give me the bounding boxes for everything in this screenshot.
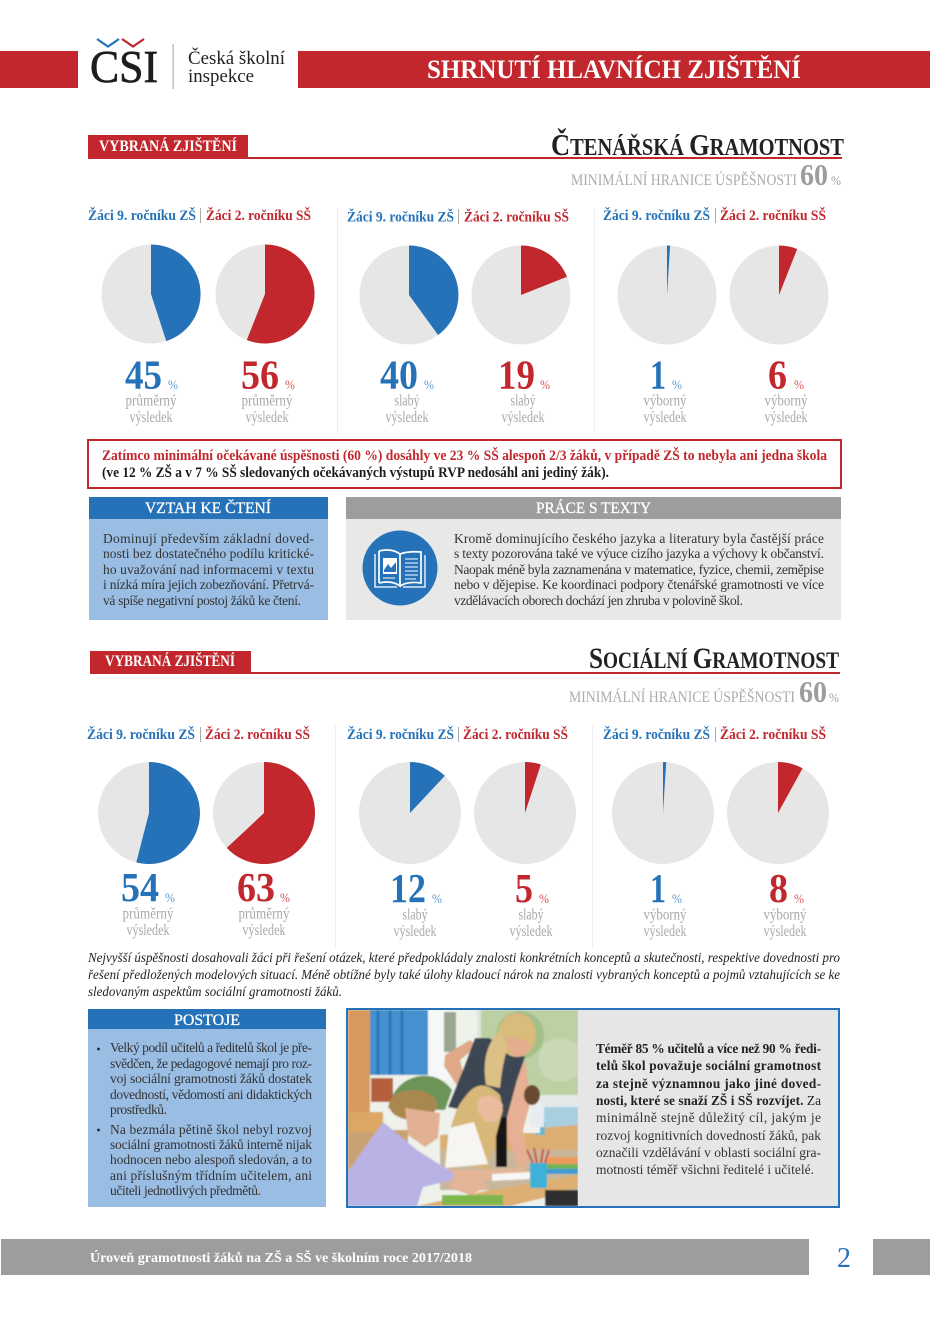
value: 45 % average: výsledek bbox=[130, 409, 172, 426]
value: 40 % weak bbox=[380, 352, 434, 426]
section heading: sociální gramotnost: SOCIÁLNÍ GRAMOTNOST bbox=[589, 642, 839, 675]
value: 56 % average: % bbox=[285, 377, 295, 392]
panel text: minimálně stejně důležitý cíl, jakým je bbox=[596, 1110, 821, 1125]
value: 63 % average: průměrný bbox=[238, 906, 290, 922]
second bullet: Na bezmála pětině škol nebyl rozvoj bbox=[110, 1122, 312, 1137]
value: 1 % excellent: % bbox=[672, 377, 682, 392]
threshold: minimal success 60 %: MINIMÁLNÍ HRANICE ÚSPĚŠNOSTI bbox=[571, 172, 797, 189]
chart group: average result, reading bbox=[88, 207, 315, 426]
second bullet: sociální gramotnosti žáků interně nijak bbox=[110, 1137, 312, 1152]
pie chart: 40 % bbox=[360, 246, 458, 344]
value: 45 % average: průměrný bbox=[126, 392, 176, 410]
pie chart: 1 % bbox=[618, 246, 716, 344]
column headings: Žáci 9. ročníku ZŠ bbox=[603, 726, 710, 743]
pie chart: 6 % bbox=[730, 246, 828, 344]
value: 12 % weak: 12 bbox=[390, 865, 426, 911]
value: 45 % average: 45 bbox=[125, 352, 162, 398]
panel text bbox=[103, 531, 314, 608]
panel text: rozvoj kognitivních dovedností žáků, pak bbox=[596, 1128, 821, 1143]
value: 40 % weak: výsledek bbox=[386, 409, 428, 426]
threshold: minimal success 60 %: % bbox=[831, 173, 841, 188]
header band bbox=[0, 51, 930, 88]
column headings: Žáci 9. ročníku ZŠ bbox=[88, 207, 196, 224]
value: 6 % excellent bbox=[764, 352, 808, 426]
panel heading: VZTAH KE ČTENÍ bbox=[145, 498, 271, 517]
column headings: Žáci 2. ročníku SŠ bbox=[463, 726, 568, 743]
value: 56 % average: průměrný bbox=[242, 392, 292, 410]
value: 12 % weak: výsledek bbox=[394, 923, 436, 940]
value: 8 % excellent: 8 bbox=[769, 865, 788, 911]
value: 8 % excellent: % bbox=[794, 891, 804, 906]
panel heading: POSTOJE bbox=[174, 1012, 240, 1029]
value: 63 % average: výsledek bbox=[242, 922, 286, 939]
value: 54 % average: % bbox=[165, 890, 175, 905]
panel text: s texty pozorována také ve výuce cizího jazyka a výchovy k občanství. bbox=[454, 546, 824, 561]
section heading: sociální gramotnost bbox=[90, 642, 840, 675]
value: 5 % weak bbox=[510, 865, 552, 940]
callout: minimum expected success bbox=[88, 440, 841, 488]
panel text bbox=[454, 531, 824, 608]
value: 54 % average: 54 bbox=[121, 864, 159, 910]
pie chart: 5 % bbox=[474, 762, 576, 864]
callout: minimum expected success: (ve 12 % ZŠ a v 7 % SŠ sledovaných očekávaných výstupů RVP nedosáhl ani jediný žák). bbox=[102, 464, 609, 481]
column headings: Žáci 2. ročníku SŠ bbox=[464, 208, 569, 226]
chart group: excellent result, reading bbox=[603, 207, 828, 426]
value: 8 % excellent: výsledek bbox=[764, 923, 806, 940]
panel text: za stejně významnou jako jiné doved- bbox=[596, 1076, 821, 1091]
first bullet: voj sociální gramotnosti žáků dostatek bbox=[110, 1071, 312, 1086]
value: 1 % excellent: výborný bbox=[644, 906, 686, 924]
panel text bbox=[596, 1041, 822, 1177]
value: 1 % excellent bbox=[644, 352, 686, 426]
column headings bbox=[603, 207, 826, 224]
value: 8 % excellent bbox=[764, 865, 806, 940]
value: 5 % weak: slabý bbox=[518, 906, 544, 924]
value: 6 % excellent: % bbox=[794, 377, 804, 392]
first bullet: prostředků. bbox=[110, 1102, 167, 1117]
section heading: čtenářská gramotnost: VYBRANÁ ZJIŠTĚNÍ bbox=[99, 136, 237, 155]
column headings bbox=[603, 726, 826, 743]
value: 19 % weak: % bbox=[540, 377, 550, 392]
section heading: sociální gramotnost: VYBRANÁ ZJIŠTĚNÍ bbox=[105, 651, 235, 670]
photo: teacher with pupils at desk bbox=[347, 1010, 582, 1206]
column headings: Žáci 2. ročníku SŠ bbox=[720, 207, 826, 224]
value: 6 % excellent: 6 bbox=[768, 352, 787, 398]
threshold: minimal success 60 % bbox=[571, 157, 841, 192]
pie chart: 12 % bbox=[359, 762, 461, 864]
text block: italic findings: řešení předložených modelových situací. Méně obtížné byly také úlohy kladoucí nárok na znalosti vybraných konceptů a pojmů vztahujících se ke bbox=[88, 968, 840, 983]
value: 6 % excellent: výborný bbox=[764, 392, 808, 410]
panel: teachers and principals bbox=[347, 1009, 839, 1207]
value: 1 % excellent: % bbox=[672, 891, 682, 906]
teacher bbox=[444, 1040, 477, 1087]
panel text: Dominují především základní doved- bbox=[103, 531, 314, 546]
chart group: weak result, reading bbox=[347, 208, 570, 426]
value: 56 % average: výsledek bbox=[246, 409, 288, 426]
value: 40 % weak: % bbox=[424, 377, 434, 392]
value: 45 % average: % bbox=[168, 377, 178, 392]
panel text: Téměř 85 % učitelů a více než 90 % ředi- bbox=[596, 1041, 821, 1056]
callout: minimum expected success: Zatímco minimální očekávané úspěšnosti (60 %) dosáhly ve 23 % SŠ alespoň 2/3 žáků, v případě ZŠ to nebyla ani jedna škola bbox=[102, 447, 828, 464]
value: 12 % weak: % bbox=[432, 891, 442, 906]
panel heading: PRÁCE S TEXTY bbox=[536, 498, 651, 517]
logo: Česká školní inspekce: inspekce bbox=[188, 66, 254, 87]
panel text: Kromě dominujícího českého jazyka a literatury byla častější práce bbox=[454, 531, 824, 546]
chart group: average result, social bbox=[87, 726, 315, 939]
panel text: nosti, které se snaží ZŠ i SŠ rozvíjet. Za bbox=[596, 1093, 821, 1108]
value: 19 % weak bbox=[498, 352, 550, 426]
second bullet: učiteli jednotlivých předmětů. bbox=[110, 1183, 261, 1198]
value: 54 % average bbox=[121, 864, 175, 939]
column headings: Žáci 2. ročníku SŠ bbox=[720, 726, 826, 743]
panel text: nebo v dějepise. Ke koordinaci podpory čtenářské gramotnosti ve více bbox=[454, 577, 824, 592]
icon: open book bbox=[362, 530, 438, 606]
threshold: minimal success 60 % bbox=[569, 674, 839, 709]
first bullet: dovedností, vědomostí ani didaktických bbox=[110, 1087, 312, 1102]
column headings: Žáci 9. ročníku ZŠ bbox=[87, 726, 195, 743]
logo: Česká školní inspekce bbox=[86, 34, 286, 92]
column headings: Žáci 9. ročníku ZŠ bbox=[603, 207, 710, 224]
first bullet: Velký podíl učitelů a ředitelů škol je pře- bbox=[110, 1040, 312, 1055]
column headings bbox=[87, 726, 310, 743]
girl bbox=[444, 1085, 503, 1170]
text block: italic findings bbox=[87, 951, 840, 1000]
second bullet: ani příslušným třídním učitelem, ani bbox=[110, 1168, 312, 1183]
text block: italic findings: Nejvyšší úspěšnosti dosahovali žáci při řešení otázek, které předpokládaly znalosti konkrétních konceptů a skutečnosti, respektive dovednosti pro bbox=[87, 951, 840, 966]
value: 1 % excellent: výsledek bbox=[644, 923, 686, 940]
panel text: vá spíše negativní postoj žáků ke čtení. bbox=[103, 593, 301, 608]
panel: work with texts bbox=[346, 497, 841, 620]
pie chart: 19 % bbox=[472, 246, 570, 344]
value: 54 % average: výsledek bbox=[126, 922, 170, 939]
logo: Česká školní inspekce: Česká školní bbox=[188, 47, 286, 69]
value: 40 % weak: slabý bbox=[394, 392, 420, 410]
value: 1 % excellent bbox=[644, 865, 686, 940]
page number: 2 bbox=[837, 1243, 851, 1274]
column headings bbox=[88, 207, 311, 224]
value: 56 % average bbox=[241, 352, 295, 426]
section heading: čtenářská gramotnost: ČTENÁŘSKÁ GRAMOTNOST bbox=[551, 127, 844, 162]
footer band bbox=[1, 1239, 930, 1275]
threshold: minimal success 60 %: 60 bbox=[800, 157, 828, 192]
panel text: Naopak méně byla zaznamenána v matematice, fyzice, chemii, zeměpise bbox=[454, 562, 824, 577]
value: 5 % weak: % bbox=[539, 891, 549, 906]
threshold: minimal success 60 %: % bbox=[829, 690, 839, 705]
column headings bbox=[347, 726, 568, 743]
column headings: Žáci 9. ročníku ZŠ bbox=[347, 726, 454, 743]
chart group: weak result, social bbox=[347, 726, 576, 940]
value: 5 % weak: výsledek bbox=[510, 923, 552, 940]
value: 63 % average: % bbox=[280, 890, 290, 905]
panel text: telů škol považuje sociální gramotnost bbox=[596, 1058, 822, 1073]
text block: italic findings: sledovaným aspektům sociální gramotnosti žáků. bbox=[88, 985, 342, 1000]
value: 1 % excellent: 1 bbox=[650, 352, 666, 398]
first bullet bbox=[97, 1040, 312, 1117]
column headings: Žáci 2. ročníku SŠ bbox=[206, 207, 311, 224]
value: 54 % average: průměrný bbox=[122, 906, 174, 922]
second bullet bbox=[97, 1122, 312, 1198]
value: 1 % excellent: 1 bbox=[650, 865, 666, 911]
value: 45 % average bbox=[125, 352, 178, 426]
threshold: minimal success 60 %: MINIMÁLNÍ HRANICE ÚSPĚŠNOSTI bbox=[569, 689, 795, 706]
value: 63 % average bbox=[237, 864, 290, 939]
panel text: ho uvažování nad informacemi v textu bbox=[103, 562, 314, 577]
value: 12 % weak bbox=[390, 865, 442, 940]
column headings bbox=[347, 208, 569, 226]
value: 8 % excellent: výborný bbox=[764, 906, 806, 924]
section heading: čtenářská gramotnost bbox=[88, 127, 844, 162]
value: 19 % weak: výsledek bbox=[502, 409, 544, 426]
value: 63 % average: 63 bbox=[237, 864, 275, 910]
value: 1 % excellent: výborný bbox=[644, 392, 686, 410]
pie chart: 8 % bbox=[727, 762, 829, 864]
boy bbox=[389, 1090, 437, 1120]
desk and stationery bbox=[417, 1175, 578, 1206]
threshold: minimal success 60 %: 60 bbox=[799, 674, 827, 709]
pie chart: 45 % bbox=[102, 244, 201, 344]
column headings: Žáci 2. ročníku SŠ bbox=[205, 726, 310, 743]
pie chart: 56 % bbox=[216, 244, 315, 344]
panel: relationship to reading bbox=[89, 497, 328, 620]
panel: attitudes bbox=[88, 1009, 326, 1207]
logo: Česká školní inspekce: ČŠI bbox=[90, 41, 158, 92]
value: 12 % weak: slabý bbox=[402, 906, 428, 924]
panel text: i nízká míra jejich zobezňování. Přetrvá- bbox=[103, 577, 314, 592]
panel text: označili vzdělávání v oblasti sociální gra- bbox=[596, 1145, 822, 1160]
page title: SHRNUTÍ HLAVNÍCH ZJIŠTĚNÍ bbox=[427, 55, 801, 84]
value: 56 % average: 56 bbox=[241, 352, 279, 398]
panel text: vzdělávacích oborech dochází jen zhruba v polovině škol. bbox=[454, 593, 743, 608]
chart group: excellent result, social bbox=[603, 726, 829, 940]
first bullet: svědčen, že pedagogové nemají pro roz- bbox=[110, 1056, 312, 1071]
value: 19 % weak: 19 bbox=[498, 352, 535, 398]
value: 1 % excellent: výsledek bbox=[644, 409, 686, 426]
value: 40 % weak: 40 bbox=[380, 352, 418, 398]
value: 6 % excellent: výsledek bbox=[764, 409, 808, 426]
pie chart: 1 % bbox=[612, 762, 714, 864]
pie chart: 54 % bbox=[98, 762, 200, 864]
pie chart: 63 % bbox=[213, 762, 315, 864]
second bullet: hodnocen nebo alespoň sledován, a to bbox=[110, 1152, 312, 1167]
value: 5 % weak: 5 bbox=[515, 865, 533, 911]
footer text: Úroveň gramotnosti žáků na ZŠ a SŠ ve školním roce 2017/2018 bbox=[90, 1249, 472, 1266]
value: 19 % weak: slabý bbox=[510, 392, 536, 410]
column headings: Žáci 9. ročníku ZŠ bbox=[347, 208, 454, 226]
panel text: nosti bez dostatečného podílu kritické- bbox=[103, 546, 314, 561]
panel text: motnosti téměř všichni ředitelé i učitelé. bbox=[596, 1162, 814, 1177]
